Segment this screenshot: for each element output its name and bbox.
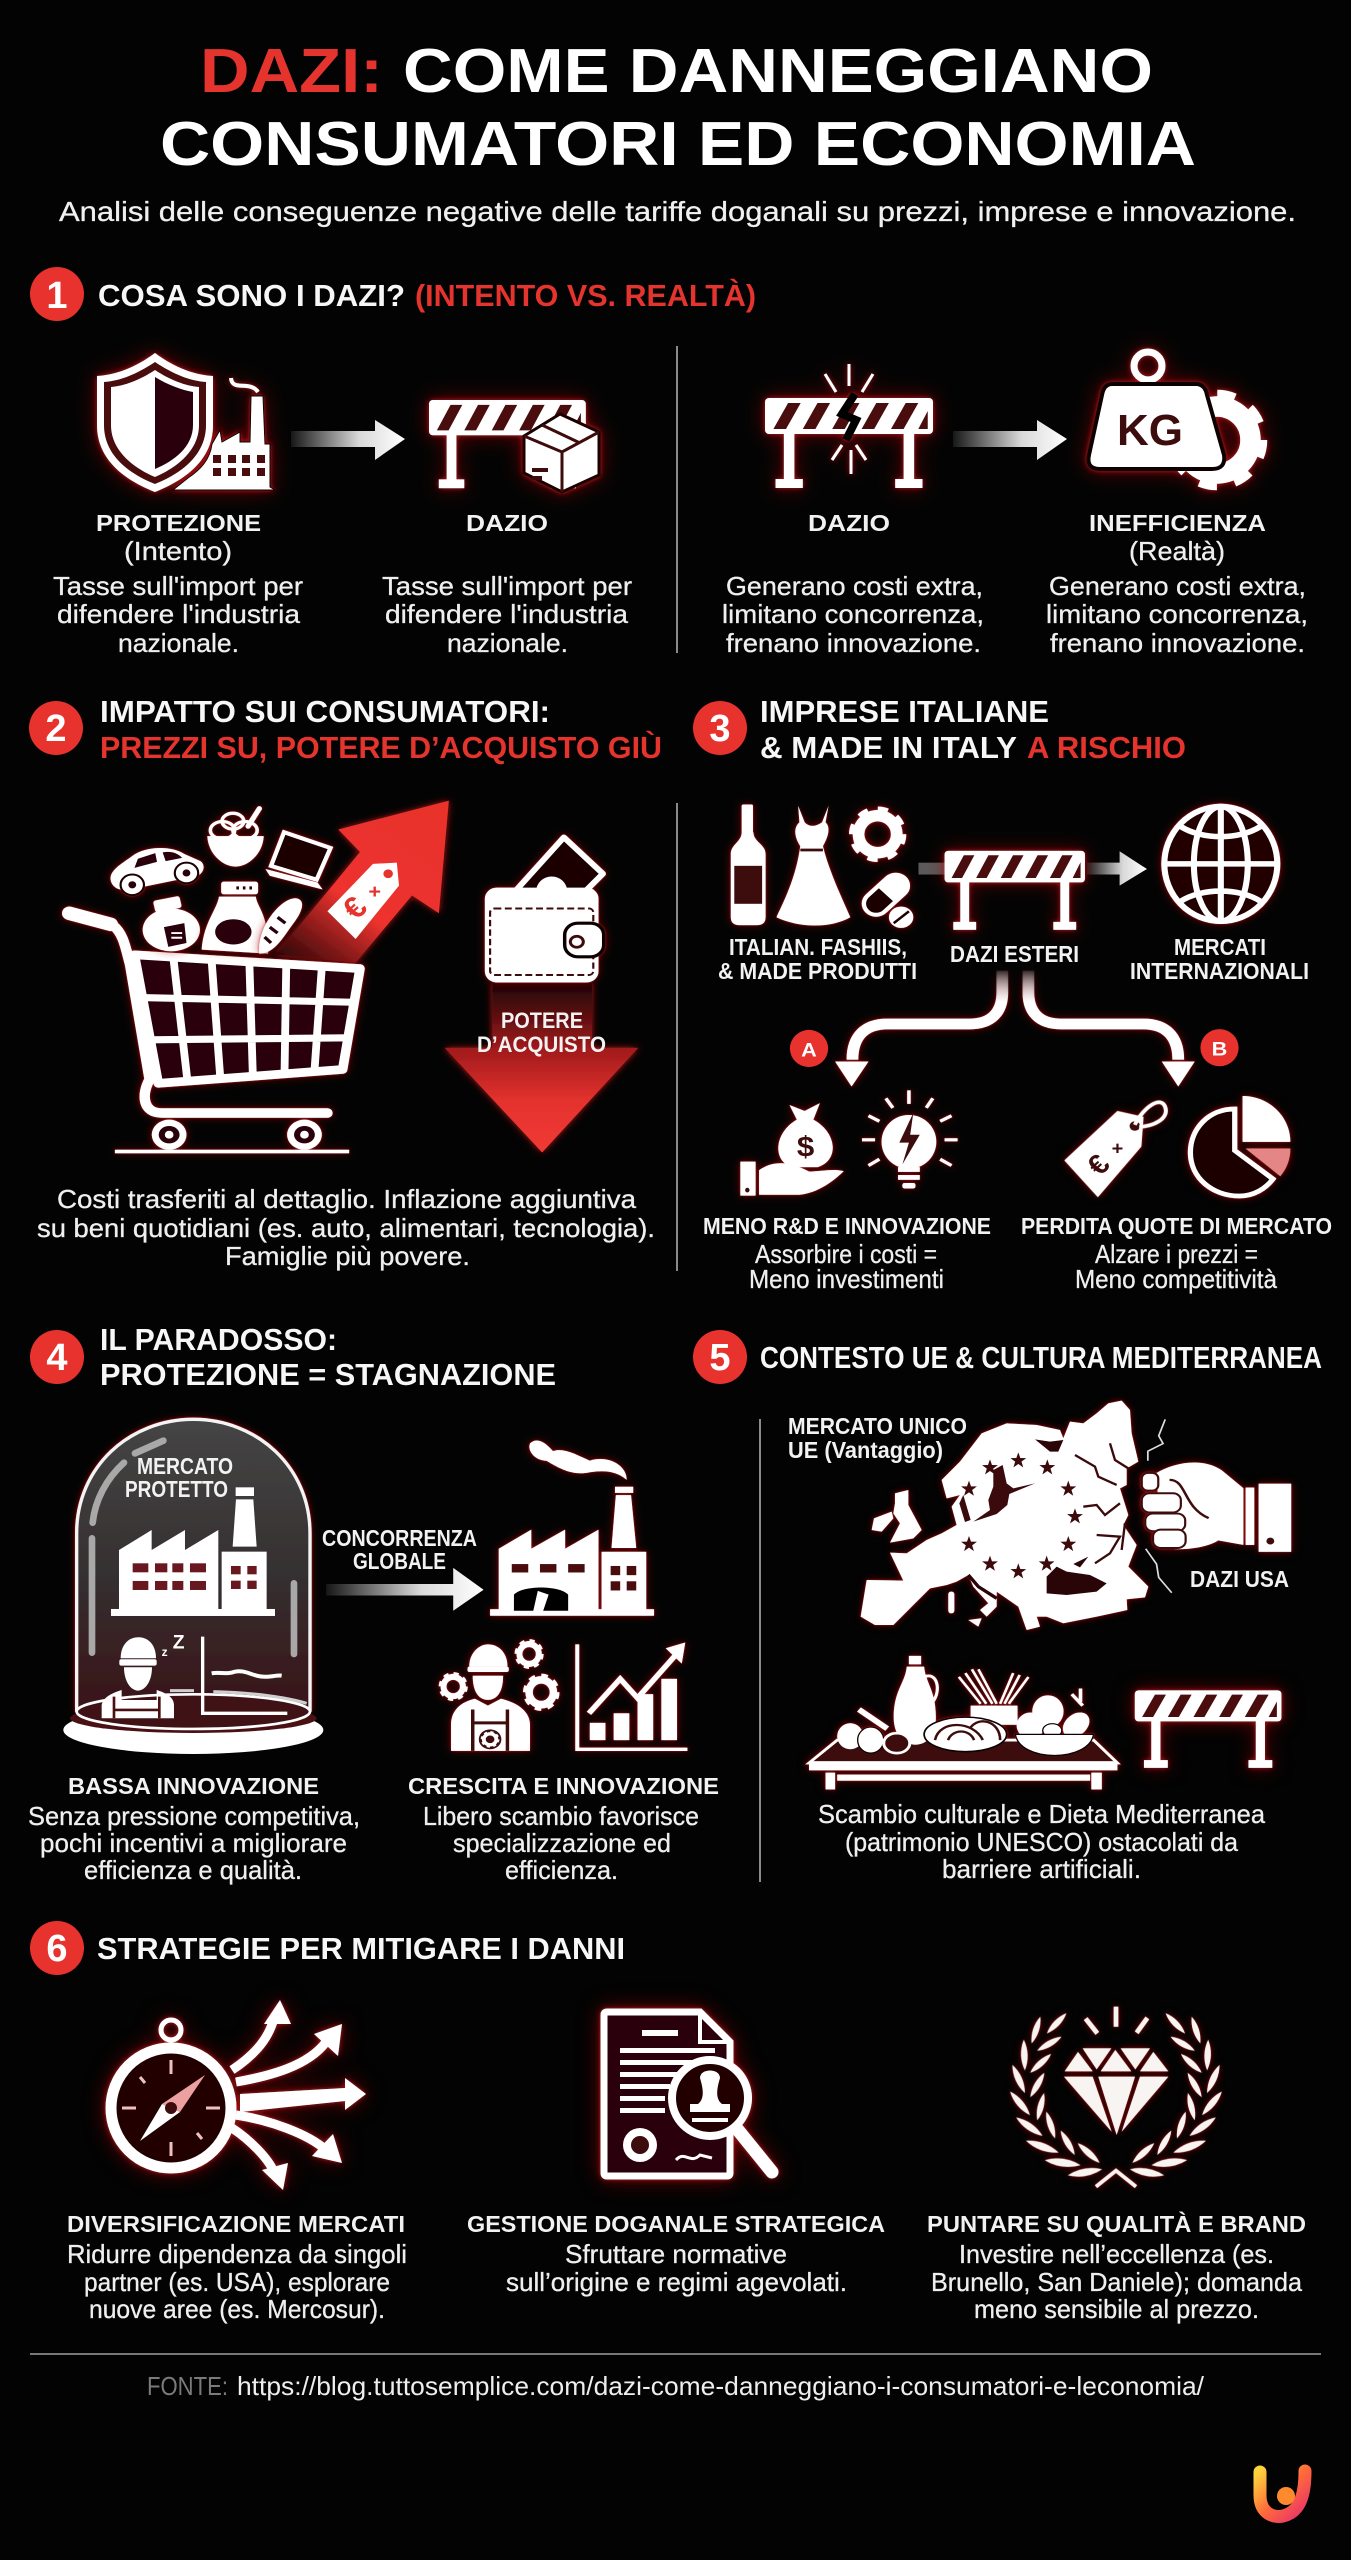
- label: concorrenza globale: [322, 1525, 477, 1574]
- label: potere d'acquisto: POTERE: [501, 1008, 583, 1033]
- arrows: branches A and B: [835, 971, 1195, 1086]
- text: bassa innovazione: BASSA INNOVAZIONE: [68, 1773, 319, 1799]
- panel: section 5 contesto UE: [693, 1330, 1322, 1884]
- text: diversificazione mercati: Ridurre dipendenza da singoli: [67, 2239, 407, 2269]
- icon: shield and factory: [97, 353, 275, 492]
- text: protezione: (Intento): [124, 536, 232, 566]
- label: mercato unico: UE (Vantaggio): [788, 1437, 943, 1463]
- text: inefficienza: limitano concorrenza,: [1046, 599, 1308, 629]
- icon: price tag with ring: €: [1081, 1149, 1117, 1182]
- icon: price tag: +: [368, 881, 381, 903]
- vertical divider: [676, 346, 678, 653]
- text: dazio: Tasse sull'import per: [382, 571, 632, 601]
- icon: gear: [853, 811, 902, 858]
- icon: barrier with box: [429, 400, 599, 492]
- heading 2: [100, 694, 662, 765]
- icon: pills: [859, 870, 913, 928]
- title: COME DANNEGGIANO: [403, 37, 1153, 106]
- icon: shopping cart: [69, 913, 360, 1153]
- text: dazio realta: DAZIO: [808, 510, 890, 536]
- text: perdita quote: Alzare i prezzi =: [1095, 1239, 1258, 1269]
- text: crescita e innovazione: Libero scambio favorisce: [423, 1801, 699, 1831]
- text: section 2 body: Famiglie più povere.: [225, 1241, 470, 1271]
- text: perdita quote: PERDITA QUOTE DI MERCATO: [1021, 1213, 1332, 1239]
- title: CONSUMATORI ED ECONOMIA: [160, 110, 1196, 179]
- text: protezione: nazionale.: [118, 628, 239, 658]
- map: europe with EU stars: [861, 1401, 1148, 1630]
- badge B: [1200, 1029, 1239, 1066]
- sleeping worker: Z: [173, 1633, 185, 1654]
- badge 4: [30, 1330, 84, 1384]
- text: diversificazione mercati: partner (es. USA), esplorare: [84, 2267, 390, 2297]
- badge 1: [30, 267, 84, 321]
- text: inefficienza: Generano costi extra,: [1049, 571, 1306, 601]
- label: mercato unico: [788, 1413, 967, 1463]
- icon: money bag and hand: [740, 1103, 844, 1196]
- text: crescita e innovazione: specializzazione ed: [453, 1828, 671, 1858]
- icon: document and magnifier: [604, 2012, 772, 2176]
- heading 3: A RISCHIO: [1027, 730, 1186, 765]
- text: meno R&D: [703, 1213, 991, 1294]
- icon: barrier: [945, 851, 1085, 930]
- text: inefficienza: frenano innovazione.: [1050, 628, 1305, 658]
- sleeping worker: [102, 1633, 185, 1718]
- badge 3: [693, 701, 747, 755]
- text: crescita e innovazione: efficienza.: [505, 1855, 618, 1885]
- label: italian products: ITALIAN. FASHIIS,: [729, 934, 907, 960]
- badge B: B: [1212, 1038, 1227, 1060]
- badge 6: 6: [46, 1928, 68, 1970]
- panel: section 1 cosa sono i dazi: [30, 267, 1308, 658]
- text: gestione doganale: GESTIONE DOGANALE STRATEGICA: [467, 2211, 885, 2237]
- icon: jar: [143, 896, 200, 951]
- badge 3: 3: [709, 708, 731, 750]
- label: potere d'acquisto: D’ACQUISTO: [477, 1032, 606, 1057]
- heading 2: PREZZI SU, POTERE D’ACQUISTO GIÙ: [100, 729, 662, 765]
- panel: section 6 strategie: [30, 1921, 1306, 2324]
- text: dazio realta: frenano innovazione.: [726, 628, 981, 658]
- text: section 2 body: Costi trasferiti al dettaglio. Inflazione aggiuntiva: [57, 1184, 637, 1214]
- protected factory: [111, 1487, 275, 1616]
- illustration: red up arrow and shopping cart: [69, 801, 638, 1153]
- icon: barrier: [1135, 1690, 1281, 1768]
- vertical divider sections 2 and 3: [676, 803, 678, 1271]
- heading 2: IMPATTO SUI CONSUMATORI:: [100, 694, 550, 729]
- badge 1: 1: [46, 275, 68, 317]
- text: perdita quote: Meno competitività: [1075, 1264, 1277, 1294]
- badge A: A: [801, 1039, 817, 1061]
- heading 4: IL PARADOSSO:: [100, 1322, 337, 1357]
- icon: open market factory: [490, 1441, 654, 1616]
- illustration: fist and food: [809, 1419, 1291, 1789]
- vertical divider: [759, 1419, 761, 1882]
- icon: pie chart: [1190, 1096, 1290, 1196]
- text: protezione: [53, 510, 303, 658]
- icon: weight and gear: [1088, 352, 1260, 483]
- heading 6: STRATEGIE PER MITIGARE I DANNI: [97, 1931, 625, 1966]
- arrow stub into barrier: [918, 863, 945, 875]
- dome glass: [77, 1419, 310, 1710]
- label: dazi esteri: DAZI ESTERI: [950, 941, 1079, 967]
- label: potere d'acquisto: [477, 1008, 606, 1057]
- arrow: barrier to global markets: [1087, 851, 1147, 886]
- label: mercati internazionali: MERCATI: [1174, 934, 1266, 960]
- label: italian products: [718, 934, 917, 984]
- arrow: purchasing power down: [445, 982, 638, 1153]
- illustration: flow diagram: [731, 805, 1290, 1197]
- icon: diamond and laurel: [1008, 2007, 1224, 2187]
- text: bassa innovazione: Senza pressione competitiva,: [28, 1801, 360, 1831]
- heading 1: COSA SONO I DAZI?: [98, 278, 405, 313]
- text: dazio: DAZIO: [466, 510, 548, 536]
- label: dazi usa: DAZI USA: [1190, 1566, 1289, 1592]
- icon: cracks: [1146, 1419, 1172, 1593]
- arrow: prices up: [275, 801, 449, 963]
- label: concorrenza globale: GLOBALE: [353, 1548, 446, 1574]
- text: section 2 body: [37, 1184, 655, 1271]
- text: bassa innovazione: [28, 1773, 360, 1885]
- text: puntare su qualita: PUNTARE SU QUALITÀ E BRAND: [927, 2210, 1306, 2237]
- badge 6: [30, 1921, 84, 1975]
- text: meno R&D: MENO R&D E INNOVAZIONE: [703, 1213, 991, 1239]
- text: gestione doganale: [467, 2211, 885, 2297]
- heading 3: [760, 694, 1186, 765]
- seas and cracks: [959, 1439, 1128, 1598]
- label: mercato protetto: PROTETTO: [125, 1476, 228, 1502]
- label: mercato protetto: [125, 1453, 233, 1502]
- badge 2: 2: [45, 708, 67, 750]
- icon: money bag and hand: $: [797, 1132, 815, 1163]
- logo: [1260, 2471, 1305, 2516]
- sleeping worker: z: [162, 1645, 168, 1659]
- icon: weight and gear: KG: [1117, 406, 1183, 455]
- source line: FONTE:: [147, 2371, 228, 2401]
- icon: price tag with ring: [1064, 1102, 1166, 1197]
- panel: section 2 impatto sui consumatori: [29, 694, 662, 1271]
- text: dazio realta: Generano costi extra,: [726, 571, 983, 601]
- arrow: dazio to inefficienza: [953, 420, 1067, 460]
- text: dazio: [382, 510, 632, 658]
- panel: section 4 il paradosso: [28, 1322, 719, 1885]
- text: inefficienza: INEFFICIENZA: [1089, 510, 1266, 536]
- icon: laptop: [265, 832, 330, 890]
- icon: wallet: [485, 837, 604, 982]
- icon: price tag: [327, 863, 399, 939]
- text: inefficienza: (Realtà): [1129, 536, 1225, 566]
- text: bassa innovazione: efficienza e qualità.: [84, 1855, 302, 1885]
- heading 3: & MADE IN ITALY: [760, 730, 1017, 765]
- text: puntare su qualita: meno sensibile al prezzo.: [974, 2294, 1259, 2324]
- text: section 5 body: Scambio culturale e Dieta Mediterranea: [818, 1799, 1266, 1829]
- badge A: [790, 1030, 828, 1067]
- text: dazio: difendere l'industria: [385, 599, 629, 629]
- text: diversificazione mercati: DIVERSIFICAZIONE MERCATI: [67, 2211, 405, 2237]
- text: puntare su qualita: [927, 2210, 1306, 2324]
- icon: active worker with gears: [441, 1641, 557, 1751]
- subtitle: Analisi delle conseguenze negative delle tariffe doganali su prezzi, imprese e innovazione.: [59, 196, 1296, 227]
- text: puntare su qualita: Investire nell’eccellenza (es.: [959, 2239, 1274, 2269]
- icon: bread: [259, 898, 302, 954]
- text: puntare su qualita: Brunello, San Daniele); domanda: [931, 2267, 1303, 2297]
- text: meno R&D: Assorbire i costi =: [755, 1239, 937, 1269]
- source line: https://blog.tuttosemplice.com/dazi-come-danneggiano-i-consumatori-e-leconomia/: [237, 2371, 1205, 2401]
- icon: bowl: [207, 809, 264, 867]
- text: section 5 body: barriere artificiali.: [942, 1854, 1141, 1884]
- arrow: protezione to dazio: [291, 420, 405, 460]
- text: section 5 body: [818, 1799, 1266, 1884]
- badge 2: [29, 701, 83, 755]
- text: meno R&D: Meno investimenti: [749, 1264, 944, 1294]
- label: italian products: & MADE PRODUTTI: [718, 958, 917, 984]
- label: mercato protetto: MERCATO: [137, 1453, 233, 1479]
- arrow: global competition: [326, 1568, 484, 1611]
- heading 3: IMPRESE ITALIANE: [760, 694, 1049, 729]
- heading 4: [100, 1322, 556, 1392]
- badge 5: 5: [709, 1337, 731, 1379]
- text: protezione: difendere l'industria: [57, 599, 301, 629]
- EU stars: [961, 1452, 1083, 1578]
- icon: mediterranean food table: [809, 1656, 1117, 1789]
- icon: glass dome with protected market: [63, 1419, 323, 1754]
- icon: fist: [1142, 1462, 1291, 1552]
- badge 4: 4: [46, 1337, 68, 1379]
- text: dazio realta: limitano concorrenza,: [722, 599, 984, 629]
- icon: bottle: [202, 882, 268, 954]
- text: gestione doganale: sull’origine e regimi agevolati.: [506, 2267, 847, 2297]
- chart: growth bars: [577, 1643, 687, 1749]
- icon: wine bottle: [731, 805, 766, 925]
- dome base: [63, 1691, 323, 1754]
- text: bassa innovazione: pochi incentivi a migliorare: [40, 1828, 347, 1858]
- text: section 2 body: su beni quotidiani (es. auto, alimentari, tecnologia).: [37, 1213, 655, 1243]
- chart: flat growth: [203, 1637, 287, 1713]
- icon: car: [111, 848, 204, 895]
- text: gestione doganale: Sfruttare normative: [565, 2239, 787, 2269]
- panel: section 3 imprese italiane: [693, 694, 1332, 1294]
- label: mercato unico: MERCATO UNICO: [788, 1413, 967, 1439]
- icon: broken barrier: [765, 364, 933, 488]
- text: section 5 body: (patrimonio UNESCO) ostacolati da: [845, 1827, 1239, 1857]
- text: dazio realta: [722, 510, 984, 658]
- heading 4: PROTEZIONE = STAGNAZIONE: [100, 1357, 556, 1392]
- icon: price tag: €: [335, 889, 374, 926]
- heading 1: [98, 278, 756, 313]
- badge 5: [693, 1330, 747, 1384]
- text: diversificazione mercati: nuove aree (es. Mercosur).: [89, 2294, 385, 2324]
- illustration: open market: [326, 1441, 687, 1751]
- map landmass: [861, 1401, 1148, 1630]
- label: mercati internazionali: INTERNAZIONALI: [1130, 958, 1309, 984]
- text: crescita e innovazione: [408, 1773, 719, 1885]
- text: dazio: nazionale.: [447, 628, 568, 658]
- title: [160, 37, 1196, 179]
- text: perdita quote: [1021, 1213, 1332, 1294]
- text: inefficienza: [1046, 510, 1308, 658]
- icon: globe: [1164, 807, 1277, 921]
- text: protezione: PROTEZIONE: [96, 510, 261, 536]
- icon: compass with arrows: [111, 2000, 366, 2190]
- label: concorrenza globale: CONCORRENZA: [322, 1525, 477, 1551]
- heading 1: (INTENTO VS. REALTÀ): [415, 278, 756, 313]
- label: mercati internazionali: [1130, 934, 1309, 984]
- title: DAZI:: [200, 37, 383, 106]
- icon: dress: [776, 806, 850, 926]
- text: protezione: Tasse sull'import per: [53, 571, 303, 601]
- text: diversificazione mercati: [67, 2211, 407, 2324]
- icon: light bulb: [862, 1090, 958, 1188]
- text: crescita e innovazione: CRESCITA E INNOVAZIONE: [408, 1773, 719, 1799]
- icon: price tag with ring: +: [1112, 1139, 1123, 1159]
